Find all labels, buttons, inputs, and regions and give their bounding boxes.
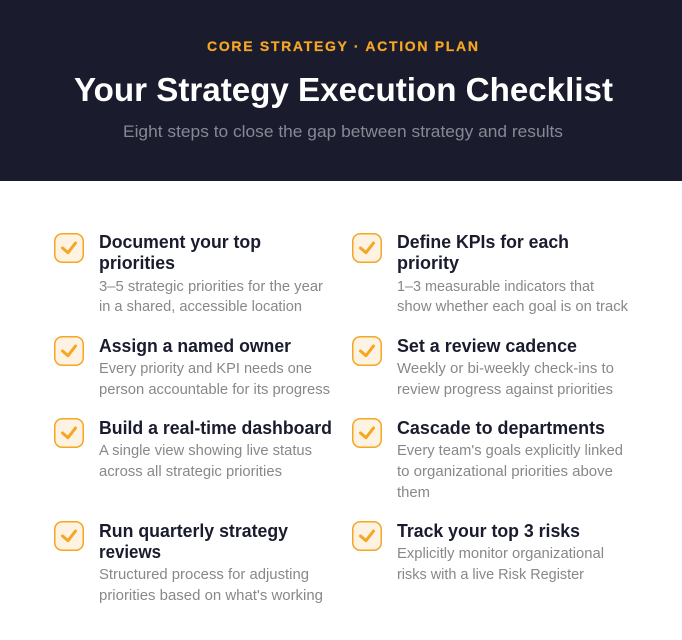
item title bbox=[397, 232, 569, 273]
item description bbox=[99, 360, 330, 398]
panel: left checklist column bbox=[55, 232, 332, 604]
item description bbox=[397, 442, 623, 501]
item description bbox=[99, 442, 312, 480]
item title bbox=[99, 521, 288, 562]
item description bbox=[397, 360, 614, 398]
item description: 3–5 strategic priorities for the year bbox=[99, 278, 323, 295]
item title bbox=[99, 232, 261, 273]
item description: review progress against priorities bbox=[397, 381, 613, 398]
item description: 1–3 measurable indicators that bbox=[397, 278, 595, 295]
item title: Cascade to departments bbox=[397, 418, 605, 438]
item description bbox=[397, 545, 604, 583]
item description: person accountable for its progress bbox=[99, 381, 330, 398]
item title: Set a review cadence bbox=[397, 336, 577, 356]
icon: checkbox bbox=[55, 419, 83, 447]
checklist item 5 bbox=[55, 418, 332, 480]
header panel bbox=[0, 0, 682, 181]
item description: Every team's goals explicitly linked bbox=[397, 442, 623, 459]
icon: checkbox bbox=[353, 234, 381, 262]
item description: to organizational priorities above bbox=[397, 463, 613, 480]
checklist item 6 bbox=[353, 418, 623, 501]
checklist item 3 bbox=[55, 336, 330, 398]
item title: Define KPIs for each bbox=[397, 232, 569, 252]
checklist item 8 bbox=[353, 521, 604, 583]
item title: Track your top 3 risks bbox=[397, 521, 580, 541]
checklist item 1 bbox=[55, 232, 323, 315]
item description: priorities based on what's working bbox=[99, 587, 323, 604]
eyebrow label: CORE STRATEGY · ACTION PLAN bbox=[207, 38, 478, 54]
checklist item 7 bbox=[55, 521, 323, 604]
icon: checkbox bbox=[55, 522, 83, 550]
item title: priorities bbox=[99, 253, 175, 273]
checklist item 2 bbox=[353, 232, 628, 315]
item description: show whether each goal is on track bbox=[397, 298, 628, 315]
item description: them bbox=[397, 484, 430, 501]
icon: checkbox bbox=[353, 337, 381, 365]
item title: priority bbox=[397, 253, 459, 273]
item title: Assign a named owner bbox=[99, 336, 291, 356]
checklist item 4 bbox=[353, 336, 614, 398]
item description: Structured process for adjusting bbox=[99, 566, 309, 583]
item description: Every priority and KPI needs one bbox=[99, 360, 312, 377]
item title: Build a real-time dashboard bbox=[99, 418, 332, 438]
icon: checkbox bbox=[353, 419, 381, 447]
item title: Document your top bbox=[99, 232, 261, 252]
item description: Weekly or bi-weekly check-ins to bbox=[397, 360, 614, 377]
item description: risks with a live Risk Register bbox=[397, 566, 584, 583]
icon: checkbox bbox=[55, 234, 83, 262]
panel: right checklist column bbox=[353, 232, 628, 583]
icon: checkbox bbox=[353, 522, 381, 550]
icon: checkbox bbox=[55, 337, 83, 365]
item description bbox=[99, 566, 323, 604]
subtitle: Eight steps to close the gap between strategy and results bbox=[123, 122, 563, 141]
item description bbox=[397, 278, 628, 315]
title: Your Strategy Execution Checklist bbox=[74, 71, 613, 108]
item title: Run quarterly strategy bbox=[99, 521, 288, 541]
item description: A single view showing live status bbox=[99, 442, 312, 459]
item description: in a shared, accessible location bbox=[99, 298, 302, 315]
item description bbox=[99, 278, 323, 315]
item title: reviews bbox=[99, 542, 161, 562]
item description: across all strategic priorities bbox=[99, 463, 282, 480]
item description: Explicitly monitor organizational bbox=[397, 545, 604, 562]
